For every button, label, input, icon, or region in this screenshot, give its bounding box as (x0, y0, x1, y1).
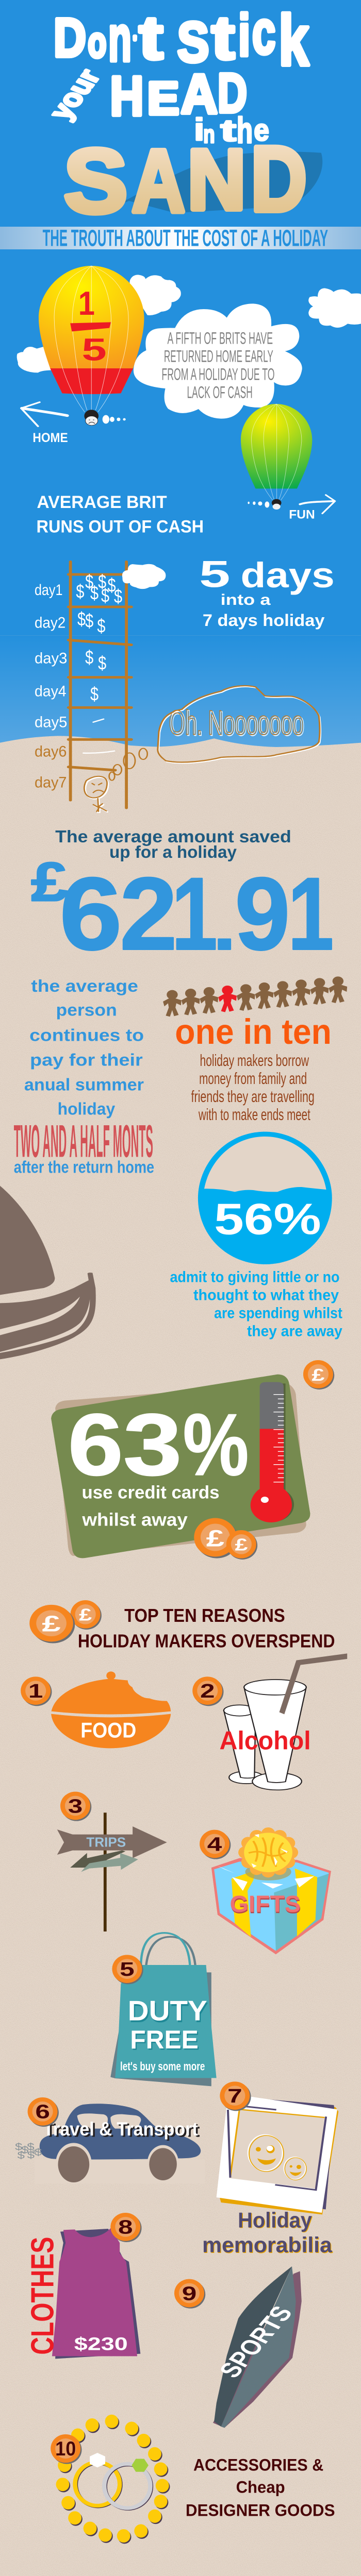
icon: coin pair: £ (79, 1605, 92, 1624)
reason 9 badge: 9 (182, 2282, 196, 2304)
title words: in the: n (203, 121, 215, 148)
title words: in the: i (194, 113, 204, 147)
stat: 621.91 pounds: 1 (172, 856, 218, 972)
reason 5: duty free bag: FREE (130, 2025, 199, 2054)
smiley faces (248, 2134, 306, 2180)
reason 5 badge (112, 1955, 143, 1984)
dollar signs: $ (90, 583, 99, 604)
text: holiday memorabilia: Holiday (238, 2208, 312, 2232)
text: 5 days (199, 553, 335, 595)
text: accessories and designer goods: DESIGNER GOODS (186, 2501, 335, 2520)
dollar signs (76, 572, 122, 705)
exhaust dollar signs: $ (27, 2141, 35, 2153)
day labels (35, 582, 67, 791)
rings (75, 2453, 151, 2509)
cloud: right edge (308, 288, 361, 328)
reason 6 badge (28, 2097, 59, 2127)
dollar signs: $ (85, 648, 93, 668)
exhaust dollar signs: $ (27, 2149, 35, 2161)
reason 8: clothes dress (52, 2228, 140, 2359)
reason 10: necklace beads (56, 2415, 170, 2544)
reason 3: trips signpost: TRIPS (86, 1835, 126, 1850)
title line: Don't Stick: t (139, 4, 163, 72)
dollar signs: $ (107, 575, 116, 596)
balloon: one in five (39, 266, 144, 412)
text: 5 days: days (241, 556, 335, 595)
text: holiday makers borrow (191, 1051, 315, 1124)
stat: 621.91 pounds: 2 (120, 856, 177, 972)
text: holiday memorabilia: Holiday (238, 2209, 313, 2233)
reason 5: duty free bag: FREE (131, 2027, 200, 2056)
dollar signs: $ (101, 585, 109, 606)
card: 63 percent (51, 1375, 310, 1558)
text: up for a holiday: up for a holiday (109, 842, 237, 862)
icon: coin pair on card: £ (235, 1535, 248, 1554)
title line: Don't Stick: D (54, 7, 86, 68)
dollar signs: $ (85, 572, 93, 592)
icon: sad stick figure (84, 776, 108, 812)
reason 1: food: FOOD (80, 1718, 136, 1742)
day labels: day7 (35, 774, 67, 791)
reason 9: sports surfboard (213, 2266, 302, 2428)
reason 10 badge (51, 2434, 81, 2464)
stat: 63%: 6 (68, 1396, 123, 1494)
reason 4 badge: 4 (207, 1833, 222, 1855)
panel: ladder section (35, 517, 335, 812)
panel: borrowing and bucket section (0, 1012, 342, 1359)
reason 5: duty free bag: DUTY (129, 1996, 208, 2028)
exhaust dollar signs: $ (32, 2149, 36, 2155)
arrow: home (21, 402, 67, 426)
text: whilst away: whilst away (81, 1510, 188, 1530)
exhaust dollar signs: $ (21, 2144, 29, 2156)
reason 2: alcohol: Alcohol (219, 1726, 311, 1755)
icon: coin pair (29, 1600, 102, 1643)
reason 6: travel car (35, 2104, 205, 2184)
text: the average person (31, 976, 138, 1020)
text: use credit cards: use credit cards (81, 1482, 219, 1502)
reason 9 badge (174, 2279, 205, 2309)
text: holiday memorabilia (202, 2208, 333, 2258)
dollar signs: $ (77, 609, 86, 630)
reason 4: gifts box: GIFTS (230, 1891, 301, 1917)
text: continues to pay: anual summer (24, 1075, 144, 1094)
reason 6: travel car: Travel & Transport (43, 2119, 198, 2140)
text: after the return home: after the return home (14, 1158, 154, 1177)
panel: balloons section (17, 266, 361, 522)
title word: HEAD: E (147, 73, 179, 124)
label: home: HOME (32, 431, 68, 445)
chart: 56 percent egg (198, 1132, 332, 1264)
reason 7 badge (220, 2081, 251, 2111)
last coins marks (84, 719, 114, 753)
panel: top ten reasons part two (57, 1792, 331, 2086)
reason 4: gifts box (211, 1827, 331, 1954)
reason 3: trips signpost (57, 1812, 167, 1931)
text: continues to pay (24, 1026, 144, 1118)
reason 2 badge (192, 1676, 223, 1706)
label: clothes: CLOTHES (24, 2237, 60, 2355)
title word: SAND: S (64, 131, 127, 232)
text: continues to pay: continues to (29, 1026, 144, 1045)
day labels: day1 (35, 582, 62, 599)
ladder (69, 562, 131, 808)
title word: SAND (64, 127, 307, 232)
stat: 621.91 pounds: . (213, 888, 236, 964)
cloud: one fifth callout (134, 303, 302, 419)
dollar signs: $ (98, 572, 106, 592)
arrow: fun (300, 495, 335, 514)
stat: 621.91 pounds: £ (31, 851, 68, 912)
reason 4 badge (200, 1830, 231, 1859)
reason 8 badge: 8 (118, 2216, 133, 2238)
fraction: 1/5: 1 (78, 285, 95, 322)
text: the average person: the average (31, 976, 138, 996)
callout text (161, 329, 275, 402)
icon: coin pair: £ (42, 1611, 61, 1636)
dollar signs: $ (98, 653, 106, 674)
reason 1: food (51, 1671, 171, 1748)
title words: in the: h (237, 110, 253, 150)
title line: Don't Stick: i (238, 3, 250, 69)
title line: Don't Stick: n (108, 2, 132, 75)
icon: passenger in green balloon (248, 499, 282, 510)
text: admit to giving little (170, 1269, 342, 1340)
icon: sad passenger (84, 410, 126, 426)
text: accessories and designer goods (186, 2456, 335, 2520)
cloud: behind balloon (129, 275, 181, 315)
title line: Don't Stick (54, 0, 309, 80)
day labels: day4 (35, 683, 67, 700)
reason 3 badge: 3 (68, 1795, 83, 1817)
shadow behind SAND (106, 151, 322, 213)
title word: SAND: A (132, 131, 185, 231)
title line: Don't Stick: c (252, 0, 275, 67)
chart: thermometer (251, 1382, 294, 1522)
reason 3 badge (60, 1792, 91, 1821)
text: 7 days holiday: 7 days holiday (203, 611, 325, 630)
stat: 621.91 pounds (31, 851, 334, 972)
balloon: green fun (241, 404, 312, 500)
title words: in the: e (254, 113, 269, 147)
title line: Don't Stick: S (177, 11, 209, 74)
reason 6 badge: 6 (35, 2100, 50, 2123)
icon: coin top right: £ (312, 1365, 324, 1385)
day labels: day3 (35, 650, 67, 667)
reason 5: duty free bag: let's buy some more (120, 2060, 205, 2073)
icon: paper people chain (163, 976, 347, 1016)
text: continues to pay: holiday (58, 1099, 115, 1118)
dollar signs: $ (90, 684, 99, 705)
reason 8: clothes dress: $230 (74, 2334, 128, 2354)
heading: runs out of cash: RUNS OUT OF CASH (37, 517, 204, 536)
icon: coin pair on card: £ (206, 1525, 224, 1551)
fraction: 1/5: 5 (81, 332, 107, 367)
dollar signs: $ (114, 586, 122, 607)
heading: top ten reasons (78, 1605, 335, 1652)
reason 4: gifts box: GIFTS (230, 1893, 301, 1918)
exhaust dollar signs (15, 2141, 42, 2161)
reason 2 badge: 2 (200, 1680, 215, 1702)
icon: coin pair on card (194, 1518, 257, 1560)
reason 1 badge (21, 1676, 52, 1706)
illustration: hat (0, 1186, 96, 1359)
text: average amount saved: The average amount saved (55, 827, 291, 846)
day labels: day5 (35, 714, 67, 731)
panel: savings section (31, 827, 347, 1020)
title word: HEAD: A (180, 63, 218, 125)
text: accessories and designer goods: ACCESSORIES & (193, 2456, 323, 2475)
reason 10 badge: 10 (55, 2437, 76, 2460)
day labels: day6 (35, 743, 67, 760)
stat: 621.91 pounds: 9 (235, 856, 290, 972)
cloud on ladder (122, 564, 166, 589)
card back (55, 1383, 306, 1556)
heading: average brit: AVERAGE BRIT (37, 493, 167, 512)
text: accessories and designer goods: Cheap (236, 2478, 285, 2497)
stat: 63% (68, 1396, 249, 1494)
callout text: LACK OF CASH (187, 383, 253, 402)
title word: SAND: D (251, 127, 307, 230)
text: continues to pay: pay for their (30, 1050, 143, 1070)
title line: Don't Stick: o (88, 18, 106, 66)
title line: Don't Stick: ' (134, 33, 136, 49)
speech bubble: oh no (158, 686, 321, 763)
title word: HEAD: D (218, 62, 247, 124)
panel: credit card section (51, 1360, 334, 1560)
reason 5: duty free bag (110, 1933, 217, 2086)
title word: HEAD: H (110, 65, 144, 127)
reason 1 badge: 1 (28, 1680, 43, 1702)
title word: HEAD (110, 62, 247, 127)
dollar signs: $ (76, 582, 84, 602)
reason 5 badge: 5 (120, 1958, 135, 1980)
label: fun: FUN (289, 508, 315, 522)
chart: 56 percent egg: 56% (214, 1194, 321, 1244)
reason 2: alcohol (219, 1653, 347, 1790)
stat: 621.91 pounds: 6 (59, 856, 122, 972)
stat: 63%: % (183, 1396, 249, 1494)
stat: 63%: 3 (123, 1396, 182, 1494)
exhaust dollar signs: $ (15, 2141, 23, 2153)
thought bubbles (109, 749, 147, 781)
exhaust dollar signs: $ (17, 2149, 25, 2161)
fraction: 1/5 (70, 285, 111, 367)
title words: in the: t (221, 113, 236, 147)
exhaust dollar signs: $ (35, 2146, 42, 2158)
reason 6: travel car: Travel & Transport (45, 2120, 200, 2141)
heading: top ten reasons: TOP TEN REASONS (124, 1605, 285, 1626)
title words: in the (194, 110, 269, 150)
title line: Don't Stick: k (278, 0, 309, 80)
cloud: left of balloon (17, 346, 55, 372)
panel: top ten reasons part one (21, 1600, 347, 1790)
bow (238, 1827, 298, 1880)
text: 5 days: 5 (199, 553, 230, 595)
text: the average person: person (56, 1001, 117, 1020)
panel: accessories and footer (51, 2415, 335, 2576)
title word: your: your (43, 65, 107, 124)
reason 9: sports surfboard: SPORTS (214, 2302, 299, 2382)
title word: SAND: N (187, 131, 246, 228)
dollar signs: $ (85, 611, 93, 632)
text: into a: into a (221, 591, 271, 608)
icon: coin top right (303, 1360, 334, 1389)
panel: top ten reasons part three (15, 2081, 338, 2428)
day labels: day2 (35, 615, 65, 631)
dollar signs: $ (97, 616, 105, 637)
reason 5: duty free bag: DUTY (128, 1995, 207, 2027)
title line: Don't Stick: t (211, 4, 235, 72)
reason 7 badge: 7 (227, 2084, 242, 2107)
reason 7: holiday photo (217, 2094, 338, 2214)
reason 8 badge (110, 2213, 142, 2242)
panel: main title (43, 0, 322, 232)
